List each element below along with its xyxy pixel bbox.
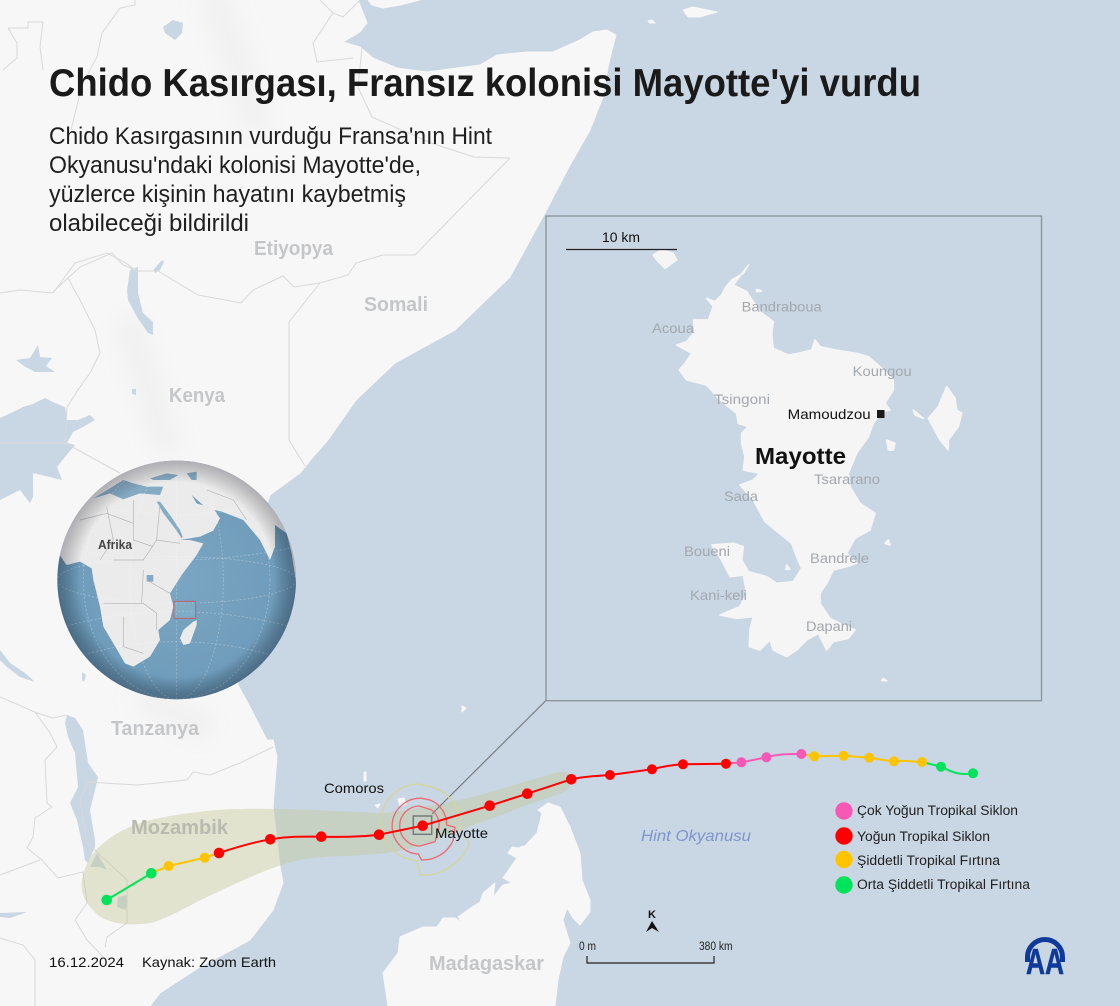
place labels: Comoros and Mayotte: Comoros bbox=[324, 780, 384, 796]
terrain shading: highlands bbox=[130, 0, 255, 725]
country labels: Kenya bbox=[169, 385, 226, 407]
globe label: Afrika: Afrika bbox=[98, 538, 133, 552]
town labels: Kani-keli bbox=[690, 587, 747, 603]
country labels bbox=[111, 238, 544, 975]
connector line to inset bbox=[432, 700, 546, 814]
capital marker: Mamoudzou: Mamoudzou bbox=[788, 406, 871, 422]
town labels: Dapani bbox=[806, 618, 852, 634]
subtitle: Chido Kasırgasının vurduğu Fransa'nın Hint bbox=[49, 123, 492, 150]
track: red segments bbox=[219, 764, 726, 853]
location box on globe bbox=[174, 601, 196, 618]
place labels: Comoros and Mayotte bbox=[324, 780, 488, 841]
inset frame bbox=[546, 216, 1042, 701]
town labels: Bandrele bbox=[810, 550, 869, 566]
track: pink segment bbox=[726, 754, 801, 764]
AA logo: AA bbox=[1026, 941, 1064, 982]
inset map: Mayotte bbox=[546, 216, 1042, 701]
subtitle: olabileceği bildirildi bbox=[49, 210, 249, 237]
map scale bar bbox=[579, 941, 732, 963]
date: 16.12.2024 bbox=[49, 954, 124, 970]
source: Kaynak: Zoom Earth bbox=[142, 954, 276, 970]
town labels: Bandraboua bbox=[742, 298, 822, 314]
title: Chido Kasırgası, Fransız kolonisi Mayotte'yi vurdu bbox=[49, 62, 921, 105]
north arrow: K bbox=[648, 909, 656, 921]
place labels: Comoros and Mayotte: Mayotte bbox=[435, 825, 488, 841]
town labels: Koungou bbox=[853, 363, 912, 379]
legend: very intense tropical cyclone: Çok Yoğun Tropikal Siklon bbox=[857, 803, 1018, 818]
town labels: Tsingoni bbox=[714, 391, 770, 407]
town labels: Sada bbox=[724, 488, 758, 504]
cyclone wind radii around Mayotte bbox=[381, 784, 469, 875]
map scale bar: 380 km bbox=[699, 941, 732, 953]
track: green segments bbox=[922, 762, 973, 774]
subtitle: Okyanusu'ndaki kolonisi Mayotte'de, bbox=[49, 152, 421, 179]
legend bbox=[835, 802, 1030, 894]
country labels: Etiyopya bbox=[254, 238, 334, 260]
town labels bbox=[652, 298, 912, 634]
cyclone forecast cone bbox=[82, 772, 570, 924]
map scale bar: 0 m bbox=[579, 941, 596, 953]
scale bar: 10 km: 10 km bbox=[602, 229, 640, 245]
Mayotte locator square bbox=[413, 816, 432, 834]
base map: land masses bbox=[0, 0, 717, 1006]
legend: severe tropical storm bbox=[835, 850, 1001, 868]
town labels: Tsararano bbox=[814, 471, 880, 487]
globe ocean bbox=[57, 461, 296, 699]
country borders bbox=[0, 0, 510, 1006]
lakes bbox=[0, 20, 183, 918]
Mayotte island shapes bbox=[653, 250, 962, 681]
country labels: Madagaskar bbox=[429, 953, 544, 975]
country labels: Somali bbox=[364, 294, 428, 316]
legend: moderate tropical storm: Orta Şiddetli Tropikal Fırtına bbox=[857, 877, 1030, 892]
globe land bbox=[58, 453, 307, 667]
legend: intense tropical cyclone bbox=[835, 827, 990, 845]
country labels: Tanzanya bbox=[111, 718, 200, 740]
cyclone track bbox=[107, 754, 973, 900]
legend: intense tropical cyclone: Yoğun Tropikal Siklon bbox=[857, 829, 990, 844]
track points bbox=[101, 749, 978, 905]
north arrow bbox=[646, 909, 659, 932]
globe graticule bbox=[57, 461, 296, 699]
subtitle: yüzlerce kişinin hayatını kaybetmiş bbox=[49, 181, 406, 208]
globe locator bbox=[57, 453, 307, 699]
island name: Mayotte: Mayotte bbox=[755, 443, 846, 469]
subtitle bbox=[49, 123, 492, 237]
track: yellow segments bbox=[801, 754, 922, 762]
town labels: Boueni bbox=[684, 543, 730, 559]
globe inland seas bbox=[93, 472, 197, 582]
Madagascar on globe bbox=[180, 620, 197, 645]
country labels: Mozambik bbox=[131, 817, 229, 839]
legend: severe tropical storm: Şiddetli Tropikal Fırtına bbox=[857, 853, 1001, 868]
town labels: Acoua bbox=[652, 320, 694, 336]
globe edge shading bbox=[57, 461, 296, 699]
globe country borders bbox=[80, 490, 247, 653]
scale bar: 10 km bbox=[566, 229, 677, 250]
ocean label: Hint Okyanusu bbox=[641, 828, 751, 845]
